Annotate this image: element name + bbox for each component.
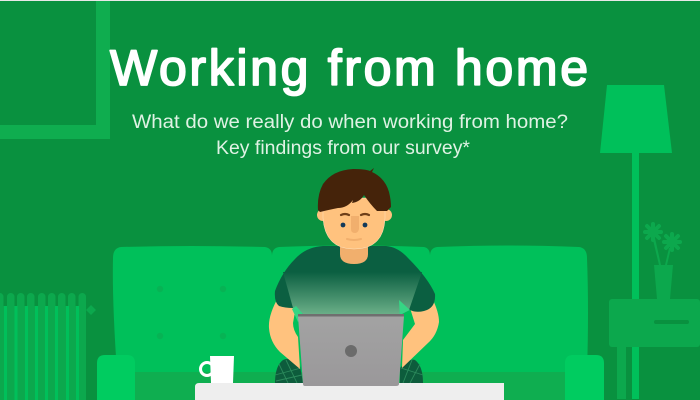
hair <box>318 168 391 212</box>
sofa <box>97 246 604 400</box>
subtitle: Key findings from our survey* <box>216 138 471 159</box>
side table with vase and flowers <box>609 224 700 399</box>
eyebrows <box>341 214 369 215</box>
neck <box>340 247 368 264</box>
radiator <box>0 293 96 400</box>
shirt <box>275 246 435 314</box>
title: Working from home <box>110 40 588 96</box>
arms <box>269 296 439 369</box>
subtitle: What do we really do when working from home? <box>132 112 568 133</box>
coffee mug <box>200 356 234 383</box>
table <box>195 383 504 400</box>
laptop <box>298 314 404 386</box>
floor lamp <box>600 85 672 399</box>
mouth <box>347 239 361 240</box>
ears <box>317 209 329 221</box>
eyes <box>341 223 345 227</box>
screen light <box>292 300 410 322</box>
nose <box>351 216 359 233</box>
face <box>323 198 385 249</box>
subtitle <box>132 112 568 159</box>
picture frame <box>0 1 110 139</box>
person <box>269 168 439 383</box>
plaid legs <box>275 359 423 383</box>
